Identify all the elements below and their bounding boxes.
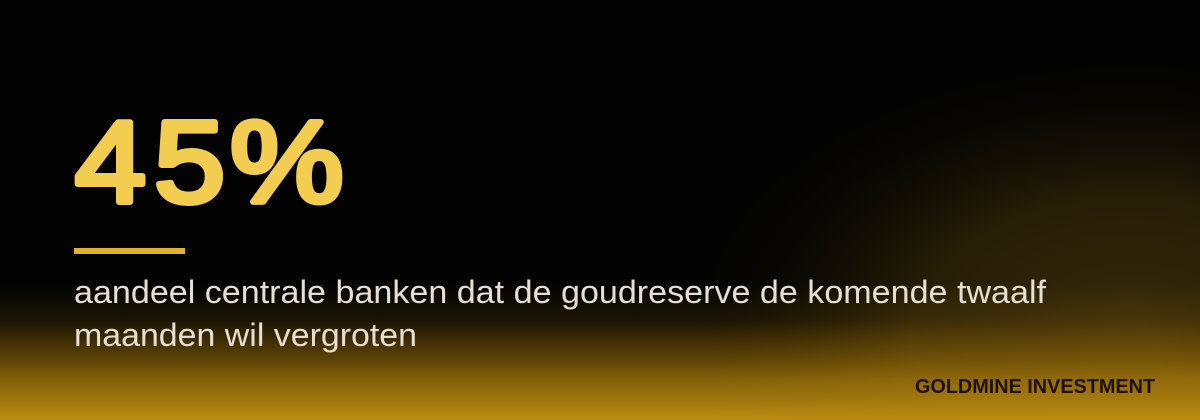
accent rule <box>74 248 185 254</box>
description text <box>74 274 1046 353</box>
big statistic: 45% <box>75 97 344 227</box>
background gold gradient bottom <box>0 285 1200 420</box>
description text: aandeel centrale banken dat de goudreserve de komende twaalf <box>74 274 1046 310</box>
brand label: GOLDMINE INVESTMENT <box>915 376 1155 398</box>
description text: maanden wil vergroten <box>74 317 417 353</box>
